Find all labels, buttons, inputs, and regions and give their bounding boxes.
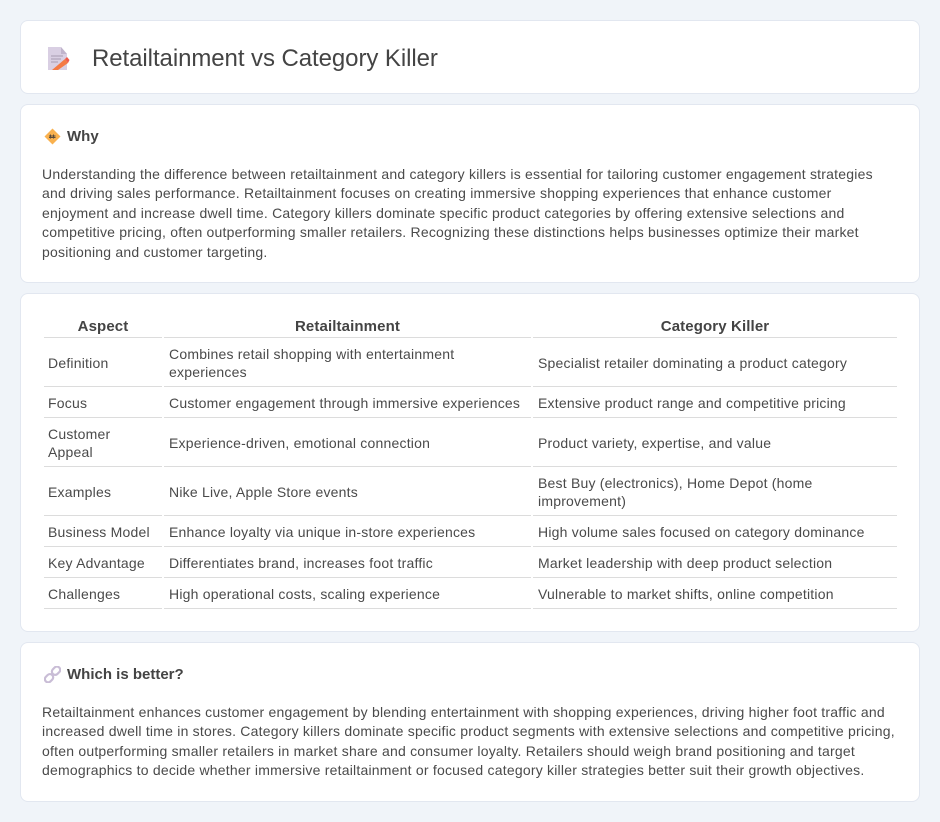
text: Experience-driven, emotional connection	[169, 435, 430, 451]
text: competitive pricing, often outperforming smaller retailers. Recognizing these distinctions helps businesses optimize their market	[42, 224, 859, 240]
panel: why	[20, 104, 920, 283]
text: Retailtainment enhances customer engagement by blending entertainment with shopping experiences, driving higher foot traffic and	[42, 704, 885, 720]
title: Retailtainment vs Category Killer	[92, 45, 438, 72]
text: Market leadership with deep product selection	[538, 555, 832, 571]
text: Customer	[48, 426, 110, 442]
panel: title card	[20, 20, 920, 94]
text block: which is better	[42, 704, 895, 778]
text: Category Killer	[661, 318, 769, 335]
heading: which is better: Which is better?	[67, 666, 184, 683]
text: improvement)	[538, 493, 626, 509]
text: Retailtainment	[295, 318, 400, 335]
text: Vulnerable to market shifts, online competition	[538, 586, 834, 602]
text: increased dwell time in stores. Category killers dominate specific product segments with extensive selections and competitive pricing,	[42, 723, 895, 739]
table: comparison	[44, 318, 897, 609]
text: experiences	[169, 364, 247, 380]
text: Enhance loyalty via unique in-store experiences	[169, 524, 475, 540]
text: High volume sales focused on category dominance	[538, 524, 865, 540]
text: Nike Live, Apple Store events	[169, 484, 358, 500]
text: Differentiates brand, increases foot traffic	[169, 555, 433, 571]
text block: why	[42, 166, 873, 260]
text: Key Advantage	[48, 555, 145, 571]
text: High operational costs, scaling experience	[169, 586, 440, 602]
text: Definition	[48, 355, 108, 371]
icon: chain link	[44, 666, 61, 683]
text: Aspect	[78, 318, 128, 335]
text: Challenges	[48, 586, 120, 602]
icon: diamond sign	[44, 128, 60, 144]
text: Appeal	[48, 444, 93, 460]
text: Product variety, expertise, and value	[538, 435, 771, 451]
text: demographics to decide whether immersive retailtainment or focused category killer strategies better suit their growth objectives.	[42, 762, 864, 778]
text: Business Model	[48, 524, 150, 540]
text: Extensive product range and competitive pricing	[538, 395, 846, 411]
icon: document with pencil	[48, 47, 70, 70]
text: Specialist retailer dominating a product category	[538, 355, 847, 371]
text: often outperforming smaller retailers in market share and consumer loyalty. Retailers should weigh brand positioning and target	[42, 743, 855, 759]
text: enjoyment and increase dwell time. Category killers dominate specific product categories by offering extensive selections and	[42, 205, 844, 221]
text: Customer engagement through immersive experiences	[169, 395, 520, 411]
panel: comparison table	[20, 293, 920, 632]
text: Examples	[48, 484, 111, 500]
heading: why: Why	[67, 128, 99, 145]
text: positioning and customer targeting.	[42, 244, 267, 260]
panel: which is better	[20, 642, 920, 802]
text: Understanding the difference between retailtainment and category killers is essential for tailoring customer engagement strategies	[42, 166, 873, 182]
text: Combines retail shopping with entertainment	[169, 346, 454, 362]
text: and driving sales performance. Retailtainment focuses on creating immersive shopping experiences that enhance customer	[42, 185, 832, 201]
text: Best Buy (electronics), Home Depot (home	[538, 475, 813, 491]
text: Focus	[48, 395, 87, 411]
